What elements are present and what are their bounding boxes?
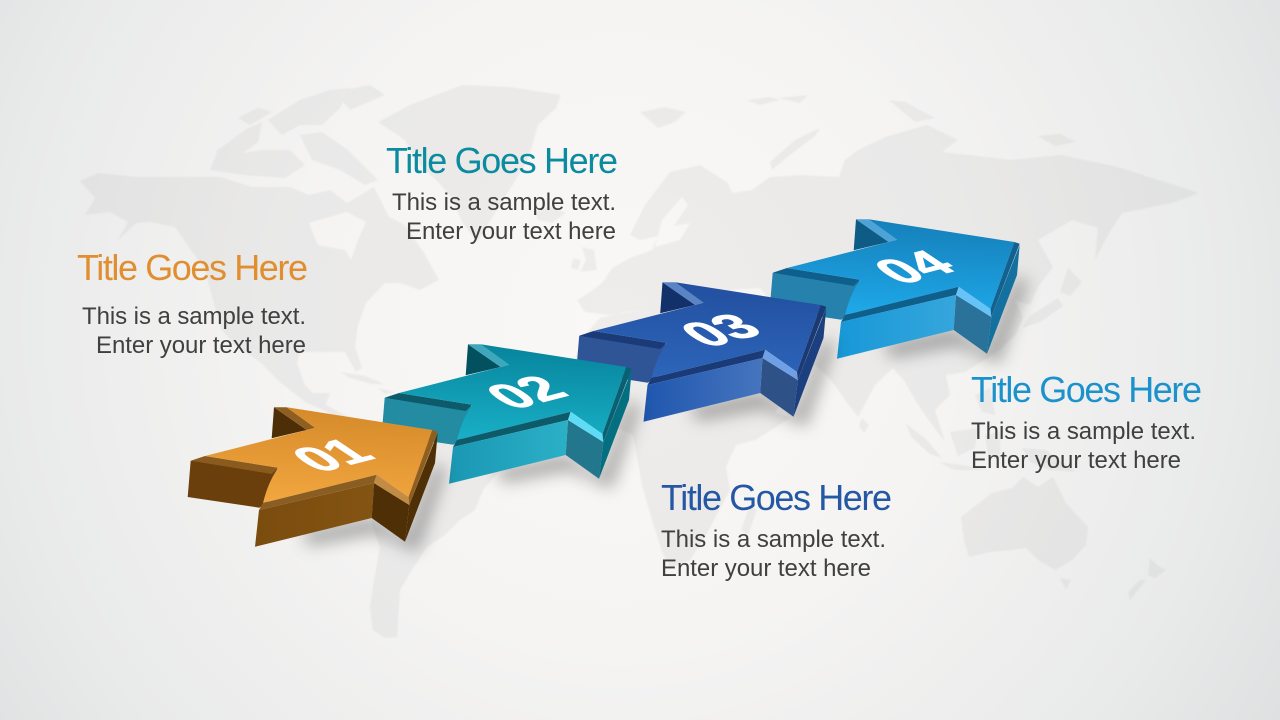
body 01 line 1: This is a sample text. [82, 303, 306, 330]
arrow 02 upper bevel [468, 344, 509, 367]
arrow 01 upper notch [272, 407, 307, 438]
body 03 line 1: This is a sample text. [661, 526, 886, 553]
map: Canadian Arctic islands [210, 85, 385, 185]
arrow 04 tail strip [773, 268, 860, 286]
arrow 01 notch side [372, 483, 409, 542]
arrow 03 shadow [688, 338, 834, 427]
map: Tasmania [1060, 578, 1071, 590]
arrow 03 light strip [762, 350, 798, 380]
body 04 line 2: Enter your text here [971, 447, 1181, 474]
arrow 04 lower front [837, 295, 956, 359]
arrow 04 right side [987, 245, 1020, 354]
arrow 02 lower front [449, 420, 568, 484]
arrow 01 light strip [374, 475, 409, 505]
body 02 line 1: This is a sample text. [392, 189, 616, 216]
text block 02 [386, 140, 618, 245]
map: Greenland [378, 85, 561, 242]
map: United Kingdom and Ireland [571, 247, 597, 272]
arrow 02 upper notch [466, 344, 501, 375]
arrow 02 right bevel [602, 367, 632, 442]
arrow 04 top face [787, 219, 1014, 315]
heading 02: Title Goes Here [386, 140, 618, 181]
arrow 03 lower front [644, 358, 762, 422]
map: Australia [961, 477, 1088, 570]
arrow 02 [382, 344, 640, 489]
body 01 line 2: Enter your text here [96, 332, 306, 359]
arrow 01 number: 01 [278, 431, 387, 480]
body 03 line 2: Enter your text here [661, 555, 871, 582]
arrow 03 upper bevel [662, 282, 704, 305]
arrow 03 tail strip [579, 331, 667, 349]
arrow 04 light strip [956, 287, 991, 317]
text block 04 [971, 369, 1202, 474]
arrow 03 [576, 282, 834, 427]
arrow 02 shadow [494, 400, 640, 489]
map: New Guinea [1022, 448, 1076, 472]
text block 01 [77, 247, 308, 359]
arrow 02 notch side [566, 420, 603, 479]
text block 03 [661, 477, 892, 582]
arrow 01 lower front [255, 483, 374, 547]
arrow 04 upper bevel [856, 219, 897, 242]
arrow 01 [188, 407, 446, 552]
arrow 01 shadow [300, 463, 446, 552]
arrow 01 right bevel [408, 430, 438, 505]
arrow 01 lower strip [259, 475, 377, 510]
arrow 03 right side [794, 308, 826, 417]
map: Sri Lanka and Southeast Asia [859, 388, 1000, 470]
map: Madagascar [741, 505, 757, 535]
arrow 04 upper notch [854, 219, 889, 250]
map: Caribbean islands [340, 372, 395, 394]
arrow 02 top face [399, 344, 626, 440]
arrow 01 tail strip [191, 456, 278, 474]
arrow 01 right side [405, 433, 438, 542]
arrow 03 upper notch [660, 282, 695, 313]
arrow 02 number: 02 [472, 368, 581, 417]
heading 03: Title Goes Here [661, 477, 892, 518]
map: Eurasia and Africa [570, 125, 1199, 568]
arrow 04 [770, 219, 1028, 364]
arrow 04 lower strip [841, 287, 959, 322]
arrow 03 number: 03 [667, 306, 775, 355]
arrow 01 top face [205, 407, 432, 503]
arrow 02 light strip [568, 412, 603, 442]
arrow 02 tail strip [385, 393, 472, 411]
map: South America [360, 420, 500, 638]
arrow 02 right side [599, 370, 632, 479]
heading 01: Title Goes Here [77, 247, 308, 288]
arrow 03 top face [594, 282, 821, 378]
arrow 02 lower strip [453, 412, 571, 447]
body 04 line 1: This is a sample text. [971, 418, 1196, 445]
arrow 01 upper bevel [274, 407, 315, 430]
map: New Zealand [1128, 558, 1166, 600]
arrow 03 lower strip [648, 350, 765, 385]
map: North America [80, 173, 439, 436]
arrow 04 tail side [770, 273, 867, 320]
arrow 03 right bevel [797, 305, 826, 380]
map: Japan [1022, 268, 1082, 328]
world map [80, 85, 1199, 638]
arrow 04 number: 04 [860, 243, 969, 292]
arrow 04 right bevel [990, 242, 1020, 317]
heading 04: Title Goes Here [971, 369, 1202, 410]
arrow 04 notch side [954, 295, 991, 354]
arrow 01 tail side [188, 461, 285, 508]
arrow 04 shadow [882, 275, 1028, 364]
map: Arctic islands of Russia [640, 95, 1076, 170]
arrow 03 tail side [576, 336, 674, 383]
arrow 02 tail side [382, 398, 479, 445]
map: Iceland [535, 207, 566, 223]
arrow 03 notch side [760, 358, 798, 417]
body 02 line 2: Enter your text here [406, 218, 616, 245]
